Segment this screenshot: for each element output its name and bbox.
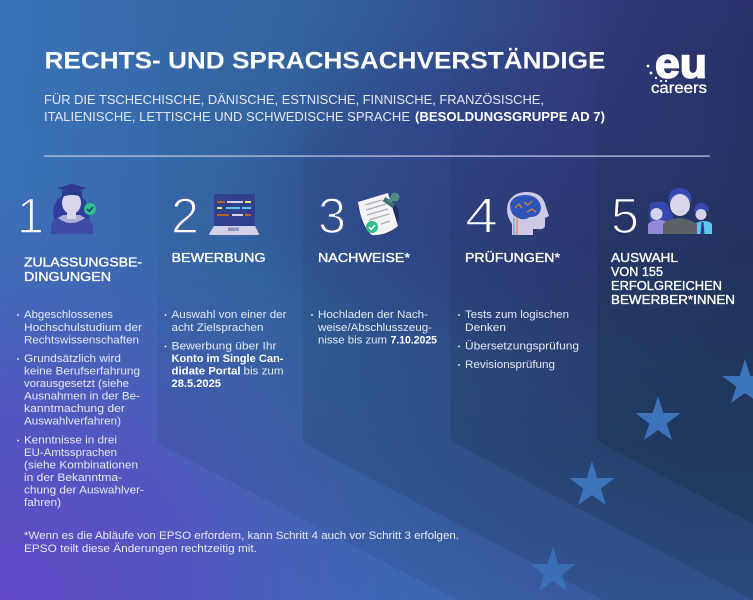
logo: EU careers bbox=[647, 40, 707, 97]
bullet list: 7.10.2025 bbox=[390, 334, 437, 346]
heading bbox=[24, 256, 142, 284]
footnote bbox=[24, 530, 459, 555]
bullet list: Bewerbung über Ihr bbox=[172, 340, 277, 352]
bullet list: Ausnahmen in der Be- bbox=[24, 390, 140, 402]
bullet list: Revisionsprüfung bbox=[465, 359, 555, 371]
heading: BEWERBUNG bbox=[172, 251, 266, 265]
heading: VON 155 bbox=[611, 265, 663, 279]
bullet list: Übersetzungsprüfung bbox=[465, 340, 579, 352]
icon: head with brain bbox=[507, 192, 549, 235]
step 5 bbox=[611, 188, 735, 307]
heading: DINGUNGEN bbox=[24, 270, 111, 284]
bullet list: Kenntnisse in drei bbox=[24, 434, 117, 446]
heading: BEWERBER*INNEN bbox=[611, 293, 735, 307]
heading: ERFOLGREICHEN bbox=[611, 279, 722, 293]
bullet list: Auswahl von einer der bbox=[172, 309, 287, 321]
icon: document with stamp bbox=[358, 192, 400, 235]
bullet list: Rechtswissenschaften bbox=[24, 334, 139, 346]
bullet list: nisse bis zum bbox=[318, 334, 387, 346]
step 2 bbox=[165, 188, 287, 390]
bullet list: weise/Abschlusszeug- bbox=[317, 322, 432, 334]
bullet list: Auswahlverfahren) bbox=[24, 416, 121, 428]
title: RECHTS- UND SPRACHSACHVERSTÄNDIGE bbox=[44, 48, 606, 74]
number 1: 1 bbox=[17, 188, 44, 244]
stars bbox=[530, 359, 753, 591]
subtitle bbox=[44, 93, 605, 124]
bullet list: vorausgesetzt (siehe bbox=[24, 378, 129, 390]
number 3: 3 bbox=[318, 188, 346, 244]
panel: step 2 column bbox=[157, 0, 753, 600]
bullet list: chung der Auswahlver- bbox=[24, 484, 144, 496]
bullet list: Hochschulstudium der bbox=[24, 322, 142, 334]
heading: AUSWAHL bbox=[611, 251, 678, 265]
panel: step 5 column bbox=[597, 0, 753, 524]
footnote: *Wenn es die Abläufe von EPSO erfordern, kann Schritt 4 auch vor Schritt 3 erfolgen. bbox=[24, 530, 459, 542]
bullet list: Hochladen der Nach- bbox=[318, 309, 428, 321]
bullet list: 28.5.2025 bbox=[172, 378, 221, 390]
bullet list bbox=[458, 309, 579, 371]
number 2: 2 bbox=[171, 188, 199, 244]
bullet list: Grundsätzlich wird bbox=[24, 353, 121, 365]
icon: group of people bbox=[648, 188, 712, 234]
heading bbox=[611, 251, 735, 307]
heading: PRÜFUNGEN* bbox=[465, 251, 560, 265]
subtitle: FÜR DIE TSCHECHISCHE, DÄNISCHE, ESTNISCHE, FINNISCHE, FRANZÖSISCHE, bbox=[44, 93, 544, 107]
logo: EU careers: careers bbox=[651, 80, 707, 97]
bullet list: EU-Amtssprachen bbox=[24, 447, 117, 459]
bullet list: Tests zum logischen bbox=[465, 309, 569, 321]
bullet list: Konto im Single Can- bbox=[172, 353, 284, 365]
subtitle: ITALIENISCHE, LETTISCHE UND SCHWEDISCHE SPRACHE bbox=[44, 110, 410, 124]
panel: step 4 column bbox=[450, 0, 753, 600]
number 5: 5 bbox=[611, 188, 639, 244]
bullet list bbox=[165, 309, 287, 390]
bullet list: acht Zielsprachen bbox=[172, 322, 264, 334]
bullet list: in der Bekanntma- bbox=[24, 472, 122, 484]
bullet list bbox=[311, 309, 437, 346]
icon: graduate bbox=[51, 184, 96, 234]
step 4 bbox=[458, 188, 579, 371]
bullet list: Abgeschlossenes bbox=[24, 309, 114, 321]
step 1 bbox=[17, 184, 144, 509]
panel: step 3 column bbox=[303, 0, 753, 600]
bullet list: didate Portal bbox=[172, 366, 240, 378]
bullet list: kanntmachung der bbox=[24, 403, 125, 415]
bullet list bbox=[17, 309, 144, 509]
subtitle: (BESOLDUNGSGRUPPE AD 7) bbox=[415, 110, 605, 124]
number 4: 4 bbox=[465, 188, 498, 244]
bullet list: keine Berufserfahrung bbox=[24, 366, 140, 378]
heading: ZULASSUNGSBE- bbox=[24, 256, 142, 270]
step 3 bbox=[311, 188, 437, 346]
bullet list: bis zum bbox=[244, 366, 284, 378]
footnote: EPSO teilt diese Änderungen rechtzeitig mit. bbox=[24, 543, 257, 555]
bullet list: (siehe Kombinationen bbox=[24, 460, 138, 472]
bullet list: fahren) bbox=[24, 497, 61, 509]
icon: laptop bbox=[209, 194, 259, 235]
divider bbox=[44, 156, 710, 157]
logo: EU careers: eu bbox=[655, 40, 707, 86]
heading: NACHWEISE* bbox=[318, 251, 410, 265]
bullet list: Denken bbox=[465, 322, 506, 334]
